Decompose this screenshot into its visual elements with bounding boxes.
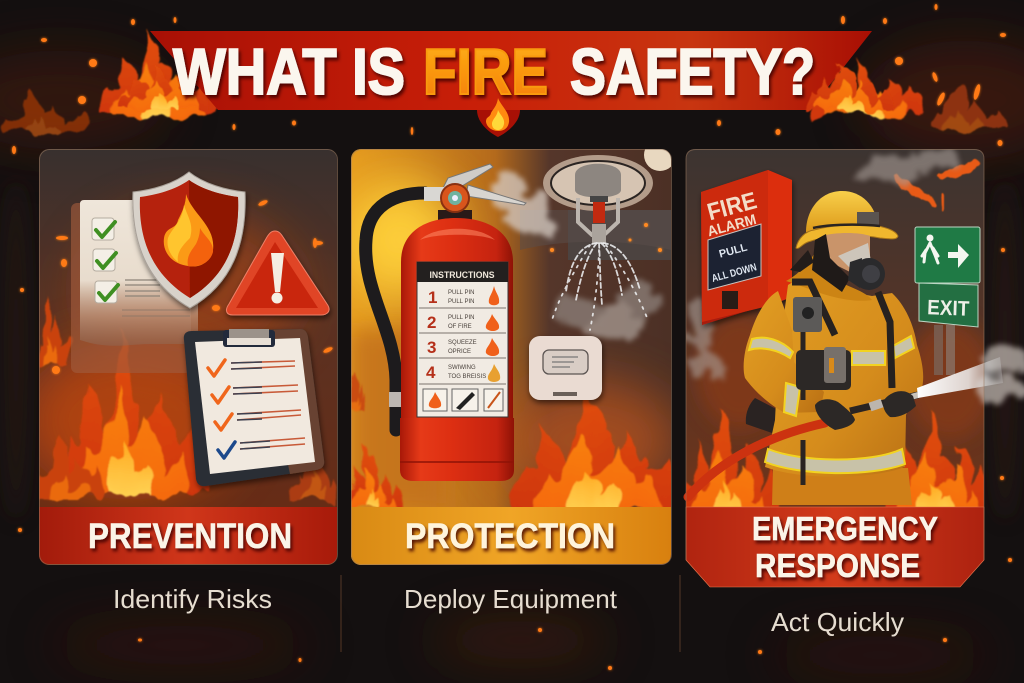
mask (853, 258, 885, 290)
helmet (806, 191, 878, 232)
trousers (772, 468, 912, 505)
label bar: prevention (39, 507, 337, 564)
caption: identify risks: Identify Risks (113, 584, 272, 614)
label bar: prevention: PREVENTION (88, 517, 292, 556)
caption: act quickly: Act Quickly (771, 607, 904, 637)
alarm text (704, 187, 760, 285)
label bar: emergency response (686, 507, 984, 587)
valve and handles (443, 164, 493, 188)
icon: ceiling sprinkler (543, 155, 653, 244)
background flames right (812, 50, 1008, 127)
icon: exit sign (915, 227, 980, 375)
panel: protection (340, 139, 681, 565)
alarm text: ALL DOWN (710, 261, 758, 285)
hood (786, 252, 872, 301)
instruction label: 3 (427, 338, 436, 357)
label bar: emergency response: RESPONSE (755, 547, 920, 584)
icon: shield with flame (133, 172, 245, 308)
firefighter (688, 191, 1003, 505)
instruction label: INSTRUCTIONS (430, 270, 494, 281)
instruction label: PULL PIN (448, 290, 474, 296)
alarm text: ALARM (706, 212, 758, 240)
title text: WHAT IS (173, 35, 405, 108)
instruction label (417, 262, 508, 417)
panel art background (340, 139, 681, 565)
straps and radio (792, 282, 892, 388)
icon: warning triangle (226, 231, 329, 315)
icon: fire alarm box (701, 170, 792, 325)
label bar: protection (351, 507, 671, 564)
alarm text: FIRE (704, 187, 760, 226)
instruction label: OF FIRE (448, 324, 472, 330)
nozzle (850, 395, 918, 411)
cylinder (401, 218, 513, 420)
instruction label: 1 (428, 288, 437, 307)
background flames left (4, 30, 218, 130)
panel art background (20, 149, 339, 565)
reflective stripes (749, 338, 793, 358)
instruction label: SQUEEZE (448, 340, 477, 346)
water spray (552, 243, 648, 330)
hose (366, 193, 425, 430)
instruction label: OPRICE (448, 349, 471, 355)
icon: fire extinguisher (366, 164, 526, 481)
instruction label: 2 (427, 313, 436, 332)
backpack (746, 398, 782, 433)
gloves (815, 399, 855, 430)
title banner (115, 31, 896, 137)
panel outlines (40, 150, 984, 564)
label bar: protection: PROTECTION (405, 517, 615, 556)
red hose (688, 423, 825, 497)
water jet (917, 357, 1003, 398)
title text: FIRE (423, 35, 548, 108)
title text (173, 35, 815, 108)
instruction label: PULL PIN (448, 299, 474, 305)
caption: deploy equipment: Deploy Equipment (404, 584, 618, 614)
banner flame tips (115, 60, 896, 110)
icon: smoke detector (529, 336, 602, 400)
label bar: emergency response: EMERGENCY (752, 510, 938, 547)
jacket arm (744, 291, 824, 413)
face (822, 233, 870, 272)
instruction label: PULL PIN (448, 315, 474, 321)
instruction label: TOG BREISIS (448, 374, 486, 380)
instruction label: 4 (426, 363, 436, 382)
smoke clouds (493, 172, 658, 340)
panel: emergency response (679, 149, 1024, 589)
icon: exit sign: EXIT (927, 296, 970, 321)
title text: SAFETY? (570, 35, 815, 108)
spray smoke (974, 344, 1024, 402)
panel: prevention (20, 149, 339, 565)
instruction label: SWIWING (448, 365, 476, 371)
banner ribbon (150, 31, 872, 110)
icon: checklist document (71, 200, 198, 373)
alarm text: PULL (718, 242, 749, 261)
icon: flame badge (477, 98, 520, 137)
icon: clipboard (184, 329, 324, 486)
panel art background (686, 149, 984, 507)
jacket torso (765, 258, 923, 477)
column dividers (341, 575, 680, 652)
